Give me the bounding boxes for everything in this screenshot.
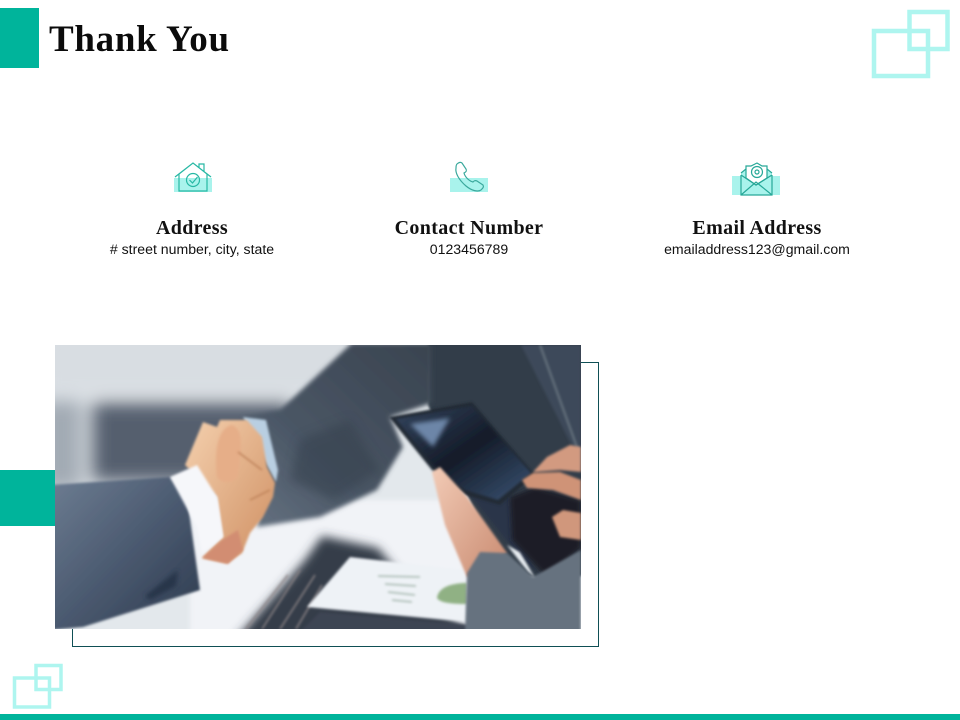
text: email address: emailaddress123@gmail.com [664, 241, 850, 257]
contact item: email address [664, 162, 850, 257]
left shirt cuff [170, 465, 223, 553]
white strip by hand [507, 545, 535, 578]
title: Thank You [49, 19, 230, 60]
icon: envelope [732, 162, 780, 196]
decorative squares bottom left [12, 664, 63, 709]
background [55, 345, 581, 629]
green pie chart [437, 583, 467, 604]
footer bar [0, 714, 960, 720]
text: contact number: 0123456789 [430, 241, 508, 257]
thumb [216, 425, 241, 482]
right shirt cuff [243, 417, 278, 482]
icon: phone [450, 162, 488, 192]
left accent block [0, 470, 55, 526]
contact item: contact number [395, 162, 543, 257]
dark wood table [235, 536, 480, 640]
text: address: # street number, city, state [110, 241, 274, 257]
holding hand [432, 467, 507, 577]
text: email address: Email Address [692, 217, 822, 239]
photo: handshake with tablet [55, 345, 581, 629]
icon: house [174, 162, 212, 192]
table [190, 500, 590, 635]
text: contact number [395, 217, 543, 257]
text: email address [664, 217, 850, 257]
paper document [307, 557, 468, 622]
photo frame outline [72, 362, 599, 647]
right suit sleeve [243, 343, 432, 527]
dark suit behind [428, 340, 590, 580]
decorative squares top right [872, 10, 950, 78]
contact item: address [110, 162, 274, 257]
text: address [110, 217, 274, 257]
text: address: Address [156, 217, 228, 239]
lower fingers [202, 530, 243, 564]
clasped hands [185, 420, 275, 563]
foreground gray sleeve [465, 550, 581, 632]
left suit sleeve [50, 477, 200, 630]
title accent block [0, 8, 39, 68]
fingers on tablet [522, 445, 581, 540]
dark lap under tablet [510, 487, 581, 578]
text: contact number: Contact Number [395, 217, 543, 239]
tablet [389, 402, 535, 505]
